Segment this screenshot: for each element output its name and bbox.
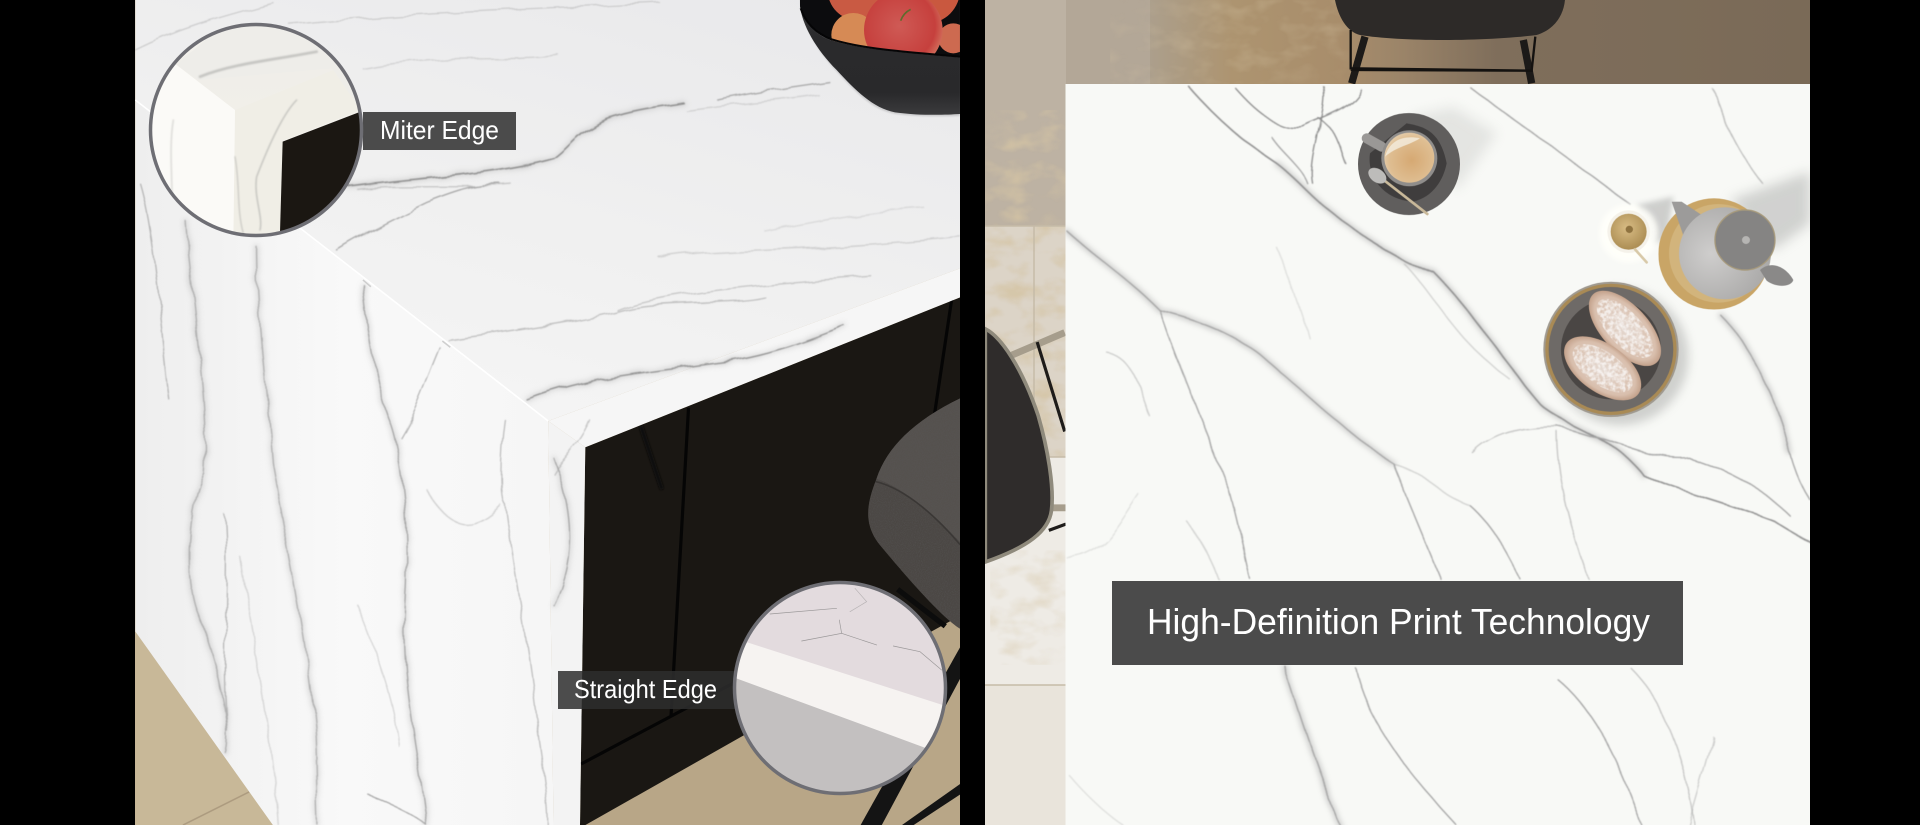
panel: dining table from above: [985, 0, 1810, 825]
icon: left chair: [985, 329, 1066, 562]
banner: high-definition print technology: [1112, 581, 1683, 665]
icon: bowl of apples: [800, 0, 968, 117]
worktop front edge: [548, 268, 960, 447]
island scene: [130, 0, 961, 825]
label: straight edge: Straight Edge: [574, 674, 717, 704]
cabinet: [580, 297, 960, 825]
icon: coffee cup and saucer: [1358, 107, 1497, 215]
magnifier: miter corner: [140, 10, 373, 243]
banner: high-definition print technology: High-Definition Print Technology: [1147, 601, 1650, 642]
stone floor: [985, 0, 1810, 825]
icon: top chair: [1335, 0, 1565, 83]
label: miter edge: Miter Edge: [380, 115, 499, 145]
icon: teapot on wooden board: [1658, 172, 1810, 310]
seam lines: [135, 100, 548, 421]
side face of island: [135, 100, 554, 825]
worktop surface: [135, 0, 960, 421]
place setting: [1358, 107, 1810, 425]
apples: [829, 0, 960, 54]
callout: miter edge: [140, 10, 516, 243]
icon: sugar pot: [1599, 197, 1673, 263]
marble veins: island: [135, 3, 960, 825]
label: miter edge: [363, 112, 516, 150]
marble veins: table: [1067, 87, 1810, 825]
icon: croissants on plate: [1543, 278, 1688, 425]
icon: stool: [861, 398, 960, 825]
panel: kitchen island with edge details: [130, 0, 968, 825]
front waterfall edge: [548, 421, 585, 825]
table top: [1066, 84, 1810, 825]
callout: straight edge: [558, 570, 957, 810]
floor tiles: [135, 616, 960, 825]
magnifier: straight edge profile: [717, 570, 957, 810]
